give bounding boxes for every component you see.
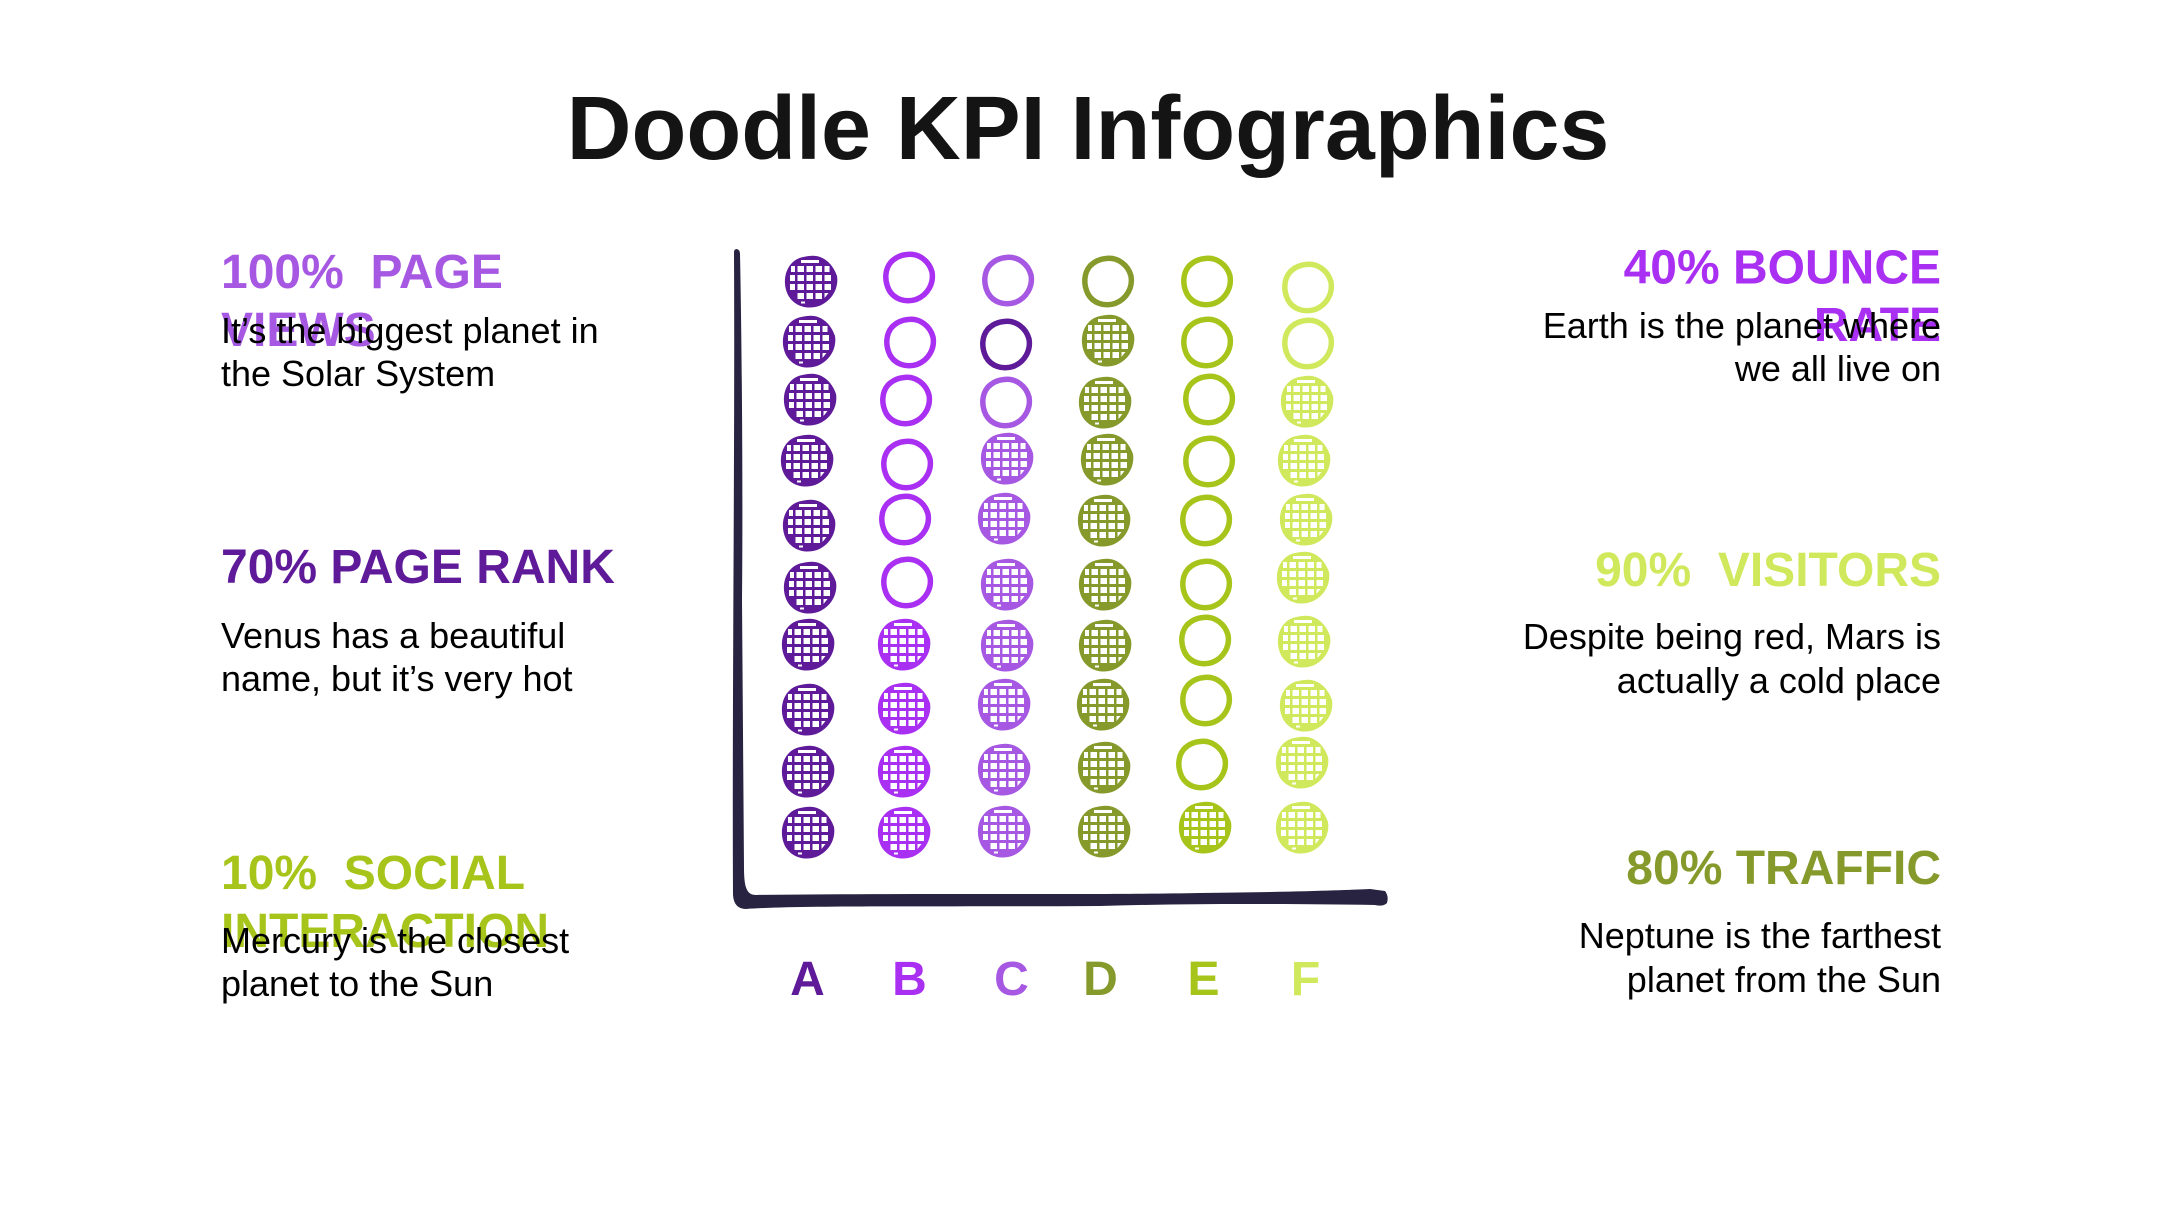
text: page views description: It’s the biggest planet in [221,310,599,351]
text: page rank description: name, but it’s very hot [221,658,573,699]
column label C: C [994,953,1029,1006]
heading: 70% page rank: 70% PAGE RANK [221,541,615,594]
text: social interaction description: planet to the Sun [221,963,493,1004]
text: traffic description: Neptune is the farthest [1579,915,1941,956]
column label F: F [1291,953,1320,1006]
chart: doodle dot matrix [733,249,1388,1006]
text: page views description: the Solar System [221,353,495,394]
heading: 100% page views: 100% PAGE [221,246,503,299]
column F dots [1276,264,1333,854]
text: bounce rate description: we all live on [1734,348,1941,389]
column C dots [978,257,1033,858]
column label D: D [1083,953,1118,1006]
column B dots [878,254,933,859]
text: bounce rate description: Earth is the planet where [1543,305,1941,346]
text: page rank description: Venus has a beautiful [221,615,565,656]
chart axes [733,249,1388,909]
text: visitors description: Despite being red, Mars is [1523,616,1941,657]
heading: 90% visitors: 90% VISITORS [1595,544,1941,597]
column D dots [1077,258,1134,858]
heading: 80% traffic: 80% TRAFFIC [1626,842,1941,895]
column E dots [1179,258,1232,854]
text: traffic description: planet from the Sun [1627,959,1941,1000]
heading: 40% bounce rate: 40% BOUNCE [1624,242,1941,294]
text: visitors description: actually a cold place [1617,660,1941,701]
column label A: A [790,953,825,1006]
title: Doodle KPI Infographics [567,79,1609,179]
text: social interaction description: Mercury is the closest [221,920,569,961]
heading: 100% page views: VIEWS [221,304,376,357]
column label E: E [1187,953,1220,1006]
column label B: B [892,953,927,1006]
heading: 10% social interaction: INTERACTION [221,905,549,958]
heading: 10% social interaction: 10% SOCIAL [221,847,525,900]
column A dots [781,256,837,859]
heading: 40% bounce rate: RATE [1814,299,1941,352]
